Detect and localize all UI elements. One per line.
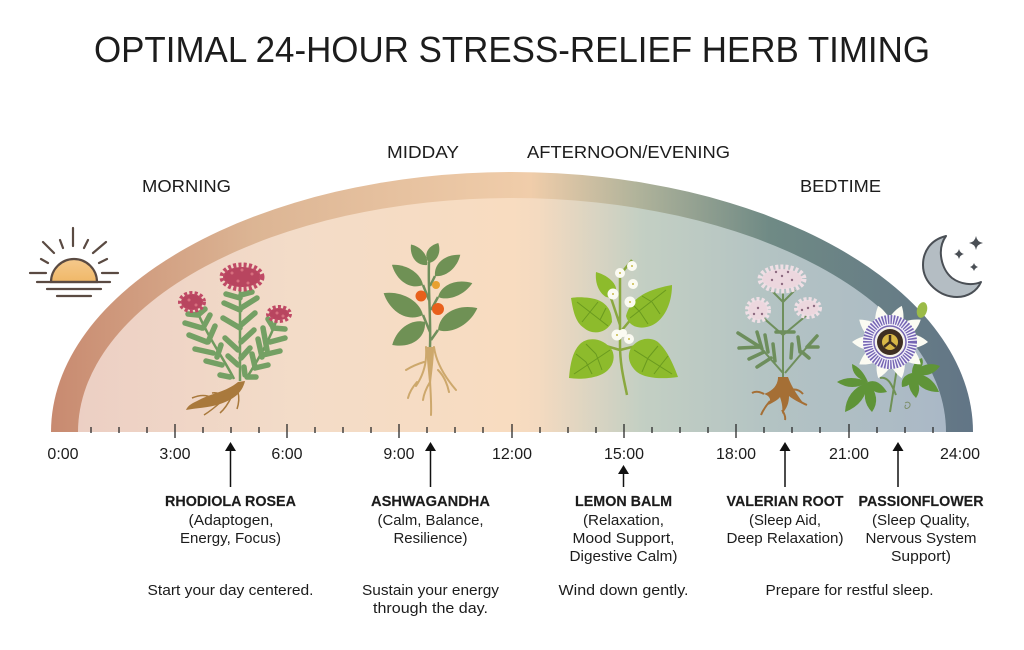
herb label: rhodiola rosea: RHODIOLA ROSEA xyxy=(165,494,297,510)
arrow: valerian root xyxy=(780,442,790,487)
herb label: passionflower: Nervous System xyxy=(866,531,976,547)
herb label: rhodiola rosea: (Adaptogen, xyxy=(188,513,274,529)
tagline: midday: through the day. xyxy=(373,601,488,617)
hour labels: 21:00 xyxy=(829,446,869,463)
hour labels: 0:00 xyxy=(47,446,79,463)
hour labels: 3:00 xyxy=(159,446,191,463)
plant: passionflower xyxy=(837,301,940,412)
herb label: valerian root: VALERIAN ROOT xyxy=(726,494,844,510)
period heading: bedtime: BEDTIME xyxy=(800,176,881,196)
tagline: midday: Sustain your energy xyxy=(362,583,500,599)
herb label: valerian root xyxy=(726,494,844,547)
herb label: lemon balm: Mood Support, xyxy=(572,531,674,547)
day arc band xyxy=(51,172,973,432)
day arc inner fill xyxy=(78,198,946,432)
plant: lemon balm xyxy=(569,260,678,395)
period heading: afternoon/evening: AFTERNOON/EVENING xyxy=(527,142,730,162)
plant: ashwagandha xyxy=(379,240,481,415)
arrow: ashwagandha xyxy=(425,442,436,487)
period heading: morning: MORNING xyxy=(142,176,231,196)
tagline: bedtime: Prepare for restful sleep. xyxy=(766,583,934,599)
arrow: lemon balm xyxy=(618,465,629,487)
arrow: rhodiola xyxy=(225,442,236,487)
herb label: rhodiola rosea xyxy=(165,494,297,547)
herb label: passionflower xyxy=(858,494,984,565)
herb label: valerian root: Deep Relaxation) xyxy=(726,531,844,547)
herb label: lemon balm: (Relaxation, xyxy=(583,513,664,529)
tagline: afternoon: Wind down gently. xyxy=(558,583,688,599)
hour labels: 18:00 xyxy=(716,446,756,463)
herb label: passionflower: Support) xyxy=(891,549,951,565)
arrow: passionflower xyxy=(892,442,904,487)
herb label: ashwagandha xyxy=(371,494,491,547)
herb label: lemon balm xyxy=(570,494,678,565)
herb label: ashwagandha: Resilience) xyxy=(394,531,468,547)
herb label: passionflower: (Sleep Quality, xyxy=(872,513,970,529)
herb label: lemon balm: LEMON BALM xyxy=(575,494,672,510)
hour labels: 9:00 xyxy=(383,446,415,463)
hour labels: 24:00 xyxy=(940,446,980,463)
tagline: midday xyxy=(362,583,500,617)
title: OPTIMAL 24-HOUR STRESS-RELIEF HERB TIMING xyxy=(94,29,930,70)
plant: valerian root xyxy=(738,267,820,420)
hour labels xyxy=(47,446,980,463)
hour labels: 6:00 xyxy=(271,446,303,463)
herb label: ashwagandha: ASHWAGANDHA xyxy=(371,494,491,510)
herb label: lemon balm: Digestive Calm) xyxy=(570,549,678,565)
herb label: ashwagandha: (Calm, Balance, xyxy=(378,513,484,529)
hour labels: 15:00 xyxy=(604,446,644,463)
tagline: morning: Start your day centered. xyxy=(148,583,314,599)
period heading: midday: MIDDAY xyxy=(387,142,459,162)
hour labels: 12:00 xyxy=(492,446,532,463)
herb label: rhodiola rosea: Energy, Focus) xyxy=(180,531,281,547)
icon: crescent moon and stars xyxy=(923,236,983,297)
herb label: valerian root: (Sleep Aid, xyxy=(749,513,821,529)
herb label: passionflower: PASSIONFLOWER xyxy=(858,494,984,510)
plant: rhodiola rosea xyxy=(180,265,290,415)
icon: rising sun xyxy=(30,228,118,296)
timeline ticks xyxy=(91,424,933,438)
